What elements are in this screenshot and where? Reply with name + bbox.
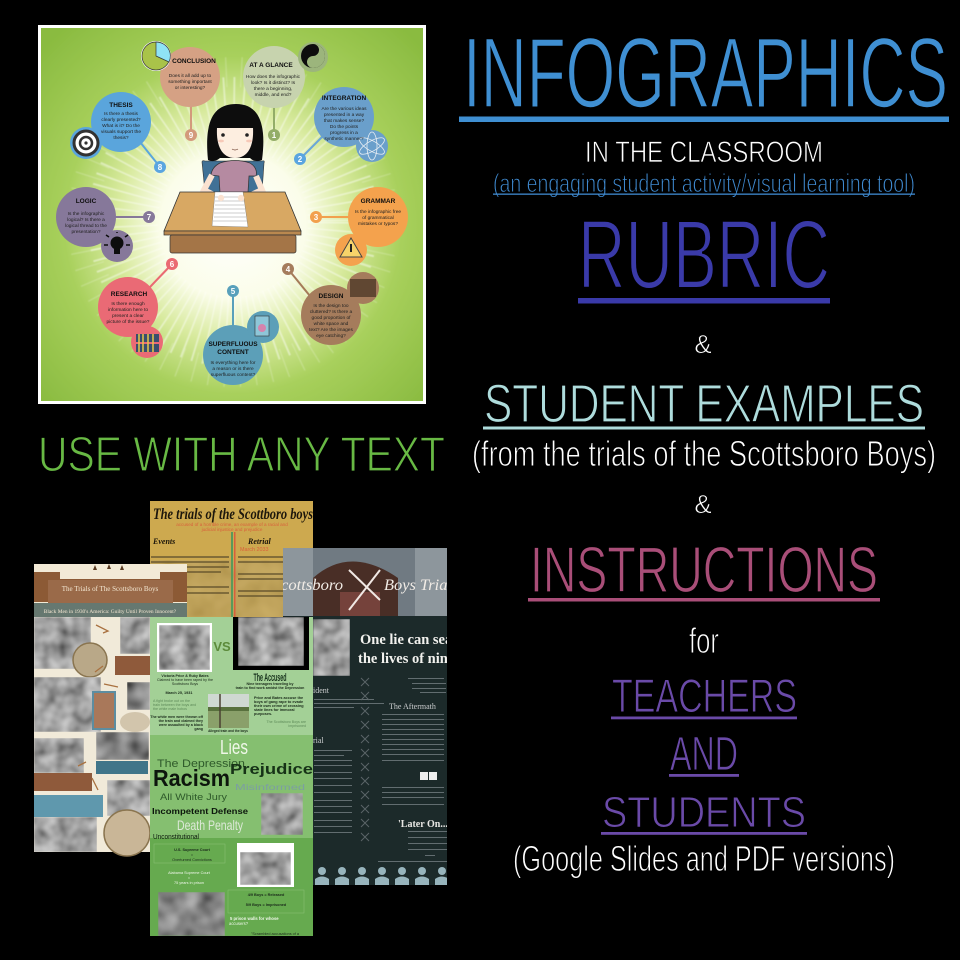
poster: trials of the scottsboro boys (gold) [150, 501, 313, 617]
circle: logic: presentation? [71, 229, 101, 235]
circle: integration: that makes sense? [324, 118, 364, 124]
circle: research: RESEARCH [111, 291, 148, 298]
word: and: AND [670, 728, 738, 781]
circle: integration: presented in a way [324, 112, 365, 118]
poster: the accused (green): the train and claimed they [159, 719, 203, 723]
poster: the accused (green): A fight broke out on the [153, 699, 190, 703]
panel: rubric infographic preview [38, 25, 426, 404]
poster header: scottsboro boys trial: cottsboro [281, 577, 343, 594]
poster: the accused (green): 4/9 Boys = Released [248, 893, 285, 897]
poster: the accused (green): VS [213, 639, 231, 654]
ampersand: & [694, 489, 712, 519]
circle: conclusion: something important [168, 79, 212, 85]
word: teachers: TEACHERS [612, 669, 797, 722]
circle: research: information here to [108, 307, 148, 313]
circle: at a glance: middle, and end? [255, 92, 292, 98]
circle: grammar: mistakes or typos? [358, 221, 398, 227]
subtitle: in the classroom: IN THE CLASSROOM [585, 136, 823, 169]
poster: the accused (green): purposes. [254, 712, 272, 716]
collage: student examples [34, 501, 456, 936]
circle: design: text? Are the images [309, 327, 353, 333]
poster: the accused (green): = [191, 853, 194, 857]
title: rubric [578, 200, 830, 309]
circle: integration: synthetic manner? [324, 136, 364, 142]
circle: superfluous content: SUPERFLUOUS [208, 341, 258, 348]
circle: design: white space and [314, 321, 349, 327]
number badges: 9 [189, 131, 194, 140]
circle: at a glance: look? Is it distinct? Is [251, 80, 296, 86]
circle: at a glance: How does the infographic [246, 74, 301, 80]
word cloud: Unconstitutional [153, 834, 199, 841]
circle: superfluous content: CONTENT [217, 349, 249, 356]
poster: the accused (green): Price and Bates accuse the [254, 696, 303, 700]
poster: the accused (green): the white male hobos [153, 707, 187, 711]
circle: logic: LOGIC [76, 198, 97, 205]
title: rubric: RUBRIC [578, 200, 830, 309]
circle: at a glance: AT A GLANCE [249, 62, 293, 69]
poster: the accused (green): 5/9 Boys = Imprisoned [246, 903, 287, 907]
word cloud: All White Jury [160, 792, 228, 802]
poster: the accused (green): accusers? [229, 921, 249, 926]
circle: thesis: thesis? [113, 135, 129, 141]
poster header: trials of the scottsboro boys (brown) [34, 564, 187, 617]
word cloud: Incompetent Defense [152, 807, 249, 816]
poster: the accused (green): train between the boys and [153, 703, 196, 707]
poster: the accused (green): boys of gang rape to evade [254, 700, 303, 704]
word cloud: Death Penalty [177, 817, 243, 833]
circle: research: Is there enough [111, 301, 145, 307]
circle: thesis: THESIS [109, 102, 133, 109]
circle: integration: progress in a [330, 130, 358, 136]
circle: conclusion: Does it all add up to [169, 73, 212, 79]
word cloud: Prejudice [230, 761, 313, 778]
circle: logic [56, 187, 133, 262]
word cloud: Racism [153, 765, 230, 791]
poster: the accused (green) [150, 617, 313, 936]
circle: integration: Do the points [330, 124, 359, 130]
poster: the accused (green): Nine teenagers traveling by [247, 682, 293, 686]
poster: the accused (green): 5 prison walls for whose [230, 916, 279, 921]
circle: integration: Are the various ideas [321, 106, 367, 112]
circle: design: eye catching? [316, 333, 346, 339]
number badges: 7 [147, 213, 152, 222]
poster: the accused (green): Victoria Price & Ruby Bates [161, 674, 209, 678]
word: and [669, 728, 739, 781]
poster: the accused (green): March 25, 1931 [165, 691, 193, 695]
circle: conclusion: CONCLUSION [172, 58, 216, 65]
poster: the accused (green): Claimed to have been raped by the [157, 678, 213, 682]
circle: thesis: visuals support the [101, 129, 141, 135]
circle: design: Is the design too [313, 303, 349, 309]
poster: the accused (green): train to find work amidst the Depression [236, 686, 304, 690]
poster: trials of the scottsboro boys (gold): Retrial [247, 537, 271, 546]
heading: use with any text: USE WITH ANY TEXT [38, 428, 445, 482]
circle: integration [314, 87, 388, 162]
circle: at a glance: there a beginning, [254, 86, 292, 92]
circle: research [98, 277, 163, 358]
poster: one lie (dark): ident [313, 686, 330, 695]
circle: grammar [335, 187, 408, 266]
ampersand: & [694, 329, 712, 359]
circle: research: picture of the issue? [107, 319, 150, 325]
word: students: STUDENTS [602, 788, 806, 837]
poster: the accused (green): 75 years in prison [174, 881, 204, 885]
people icons [315, 867, 449, 885]
word: for: for [689, 620, 719, 661]
poster header: trials of the scottsboro boys (brown): The Trials of The Scottsboro Boys [62, 585, 159, 593]
circle: integration: INTEGRATION [322, 95, 366, 102]
number badges [143, 129, 322, 297]
poster: one lie (dark): 'Later On... [398, 819, 448, 830]
number badges: 6 [170, 260, 175, 269]
poster: one lie (dark): rial [313, 736, 324, 745]
number badges: 1 [272, 131, 277, 140]
circle: logic: logical? Is there a [67, 217, 105, 223]
circle: conclusion: or interesting? [175, 85, 206, 91]
circle: grammar: Is the infographic free [355, 209, 401, 215]
circle: at a glance [243, 42, 328, 108]
poster: trials of the scottsboro boys (gold): judicial injustice and prejudice [201, 527, 263, 532]
poster header: trials of the scottsboro boys (brown): Black Men in 1930's America: Guilty Until Proven Innocent? [44, 609, 177, 615]
poster: the accused (green): Scottsboro Boys [172, 682, 198, 686]
poster: trials of the scottsboro boys (gold): Events [152, 537, 175, 546]
poster: one lie (dark): the lives of nine [358, 651, 455, 667]
circle: thesis: Is there a thesis [104, 111, 139, 117]
poster: one lie (dark) [281, 548, 456, 885]
poster: trials of the scottsboro boys (gold): March 2033 [240, 547, 268, 553]
number badges: 2 [298, 155, 303, 164]
poster: the accused (green): Overturned Convictions [172, 858, 212, 862]
circle: superfluous content: a reason or is there [212, 366, 254, 372]
poster: the accused (green): U.S. Supreme Court [174, 848, 211, 852]
number badges: 5 [231, 287, 236, 296]
circle: conclusion [141, 41, 220, 107]
poster: the accused (green): = [188, 876, 191, 880]
circle: logic: Is the infographic [68, 211, 105, 217]
circle: thesis: What is it? Do the [102, 123, 140, 129]
poster: the accused (green): were assaulted by a black [158, 723, 203, 727]
poster: trials of the scottsboro boys (brown) body [34, 617, 164, 856]
connector lines [115, 100, 350, 330]
circle: design: cluttered? Is there a [310, 309, 353, 315]
circle: design [301, 272, 379, 345]
word cloud: The Depression [157, 758, 245, 770]
poster: the accused (green): imprisoned [288, 724, 306, 728]
circle: logic: logical thread to the [65, 223, 107, 229]
poster: the accused (green): The Accused [254, 672, 286, 684]
poster: the accused (green): their own crime of crossing [254, 704, 304, 708]
circle: design: good proportion of [312, 315, 351, 321]
circle: grammar: GRAMMAR [361, 198, 396, 205]
number badges: 3 [314, 213, 319, 222]
word cloud: Misinformed [235, 783, 305, 792]
poster: one lie (dark): One lie can seal [360, 632, 456, 648]
circle: thesis: clearly presented? [101, 117, 141, 123]
poster: the accused (green): state lines for immoral [254, 708, 295, 712]
poster header: scottsboro boys trial: Boys Trial [384, 577, 453, 594]
circle: superfluous content [203, 311, 279, 385]
number badges: 4 [286, 265, 291, 274]
word cloud: Lies [220, 737, 248, 759]
poster: the accused (green): The white men were thrown off [150, 715, 204, 719]
circle: superfluous content: Is everything here for [210, 360, 256, 366]
poster header: scottsboro boys trial [281, 548, 453, 616]
poster: one lie (dark): The Aftermath [389, 702, 436, 711]
poster: trials of the scottsboro boys (gold): The trials of the Scottboro boys [153, 506, 313, 523]
circle: design: DESIGN [319, 293, 344, 300]
circle: grammar: of grammatical [362, 215, 394, 221]
word cloud [152, 737, 313, 841]
poster: the accused (green): The Scottsboro Boys are [266, 720, 306, 724]
circle: research: present a clear [112, 313, 144, 319]
illustration: student at desk [164, 104, 301, 253]
poster: the accused (green): gang [194, 727, 203, 731]
poster: trials of the scottsboro boys (gold): accused of a horrible crime, an example of a racial and [176, 522, 288, 527]
poster: the accused (green): Alleged train and the boys [208, 729, 248, 733]
number badges: 8 [158, 163, 163, 172]
poster: the accused (green): Alabama Supreme Court [168, 871, 211, 875]
circle: superfluous content: superfluous content? [211, 372, 256, 378]
poster: the accused (green): "Scrambled accusations of a [251, 932, 300, 936]
circle: thesis [70, 92, 151, 159]
